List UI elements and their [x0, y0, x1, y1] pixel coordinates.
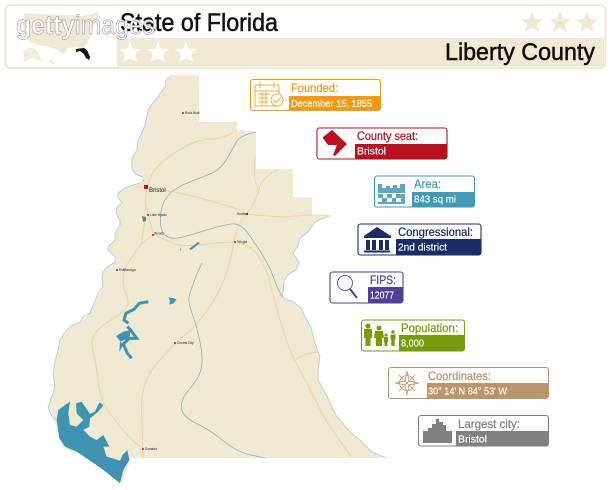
lakes: north: [142, 216, 200, 251]
icon: area grid: [378, 184, 405, 204]
badge: FIPS: 12077: [370, 290, 394, 302]
coastline east: [282, 216, 387, 458]
badge: Congressional: 2nd district: [398, 242, 447, 254]
header panel: [6, 5, 606, 68]
badge: Area: Area:: [414, 177, 441, 191]
icon: calendar: [255, 82, 283, 106]
badge: Population: 8,000: [401, 338, 424, 350]
icon: county shape: [323, 130, 347, 156]
badge: Founded: [250, 80, 380, 110]
icon: capitol building: [364, 227, 391, 252]
city labels: Estiffanulga: [119, 268, 136, 272]
badge: Area: 843 sq mi: [414, 194, 456, 206]
title: State of Florida: State of Florida: [120, 9, 278, 37]
stars: left: [119, 41, 197, 62]
badge: Coordinates: Coordinates:: [428, 369, 491, 383]
city labels: Telogia: [237, 240, 247, 244]
coastline west: [48, 75, 172, 420]
badge: Largest city: Bristol: [458, 434, 487, 446]
icon: magnifier: [338, 276, 357, 298]
rivers: [160, 132, 282, 458]
city labels: Lake Mystic: [150, 213, 167, 217]
city labels: [116, 111, 248, 451]
lakes and bay: [57, 297, 177, 483]
city labels: Hosford: [237, 212, 248, 216]
badge: Founded: December 15, 1855: [291, 98, 372, 110]
badge: Founded: Founded:: [291, 81, 338, 95]
badge: Coordinates: 30° 14' N 84° 53' W: [428, 386, 507, 398]
icon: Florida highlighted: [76, 48, 90, 60]
city labels: Central City: [177, 341, 194, 345]
county map: [48, 75, 387, 483]
badge: Population: [362, 320, 464, 351]
badge: Largest city: [418, 416, 548, 446]
stars: right: [521, 11, 598, 32]
badge: FIPS: FIPS:: [370, 273, 396, 287]
badge: Congressional: [358, 224, 481, 255]
icon: skyline: [423, 419, 452, 443]
badge: County seat: Bristol: [357, 146, 386, 158]
roads: [92, 130, 352, 458]
watermark: gettyimages: [16, 10, 155, 40]
badge: Area: [374, 176, 474, 207]
icon: USA map: [23, 11, 100, 64]
badge: County seat: [317, 128, 447, 159]
county name: Liberty County: [445, 39, 595, 66]
icon: compass rose: [395, 371, 419, 395]
city labels: Rock Bluff: [185, 111, 200, 115]
header band: [117, 38, 604, 66]
land outline: [48, 75, 387, 483]
badge: Coordinates: [388, 368, 548, 398]
icon: family: [364, 323, 396, 346]
city labels: Woods: [154, 232, 164, 236]
badge: Population: Population:: [401, 321, 458, 335]
badge: Congressional: Congressional:: [398, 225, 473, 239]
city labels: Sumatra: [145, 447, 157, 451]
badge: Largest city: Largest city:: [458, 417, 520, 431]
city labels: Bristol: [149, 188, 166, 194]
badge: FIPS: [330, 272, 403, 303]
badge: County seat: County seat:: [357, 129, 418, 143]
